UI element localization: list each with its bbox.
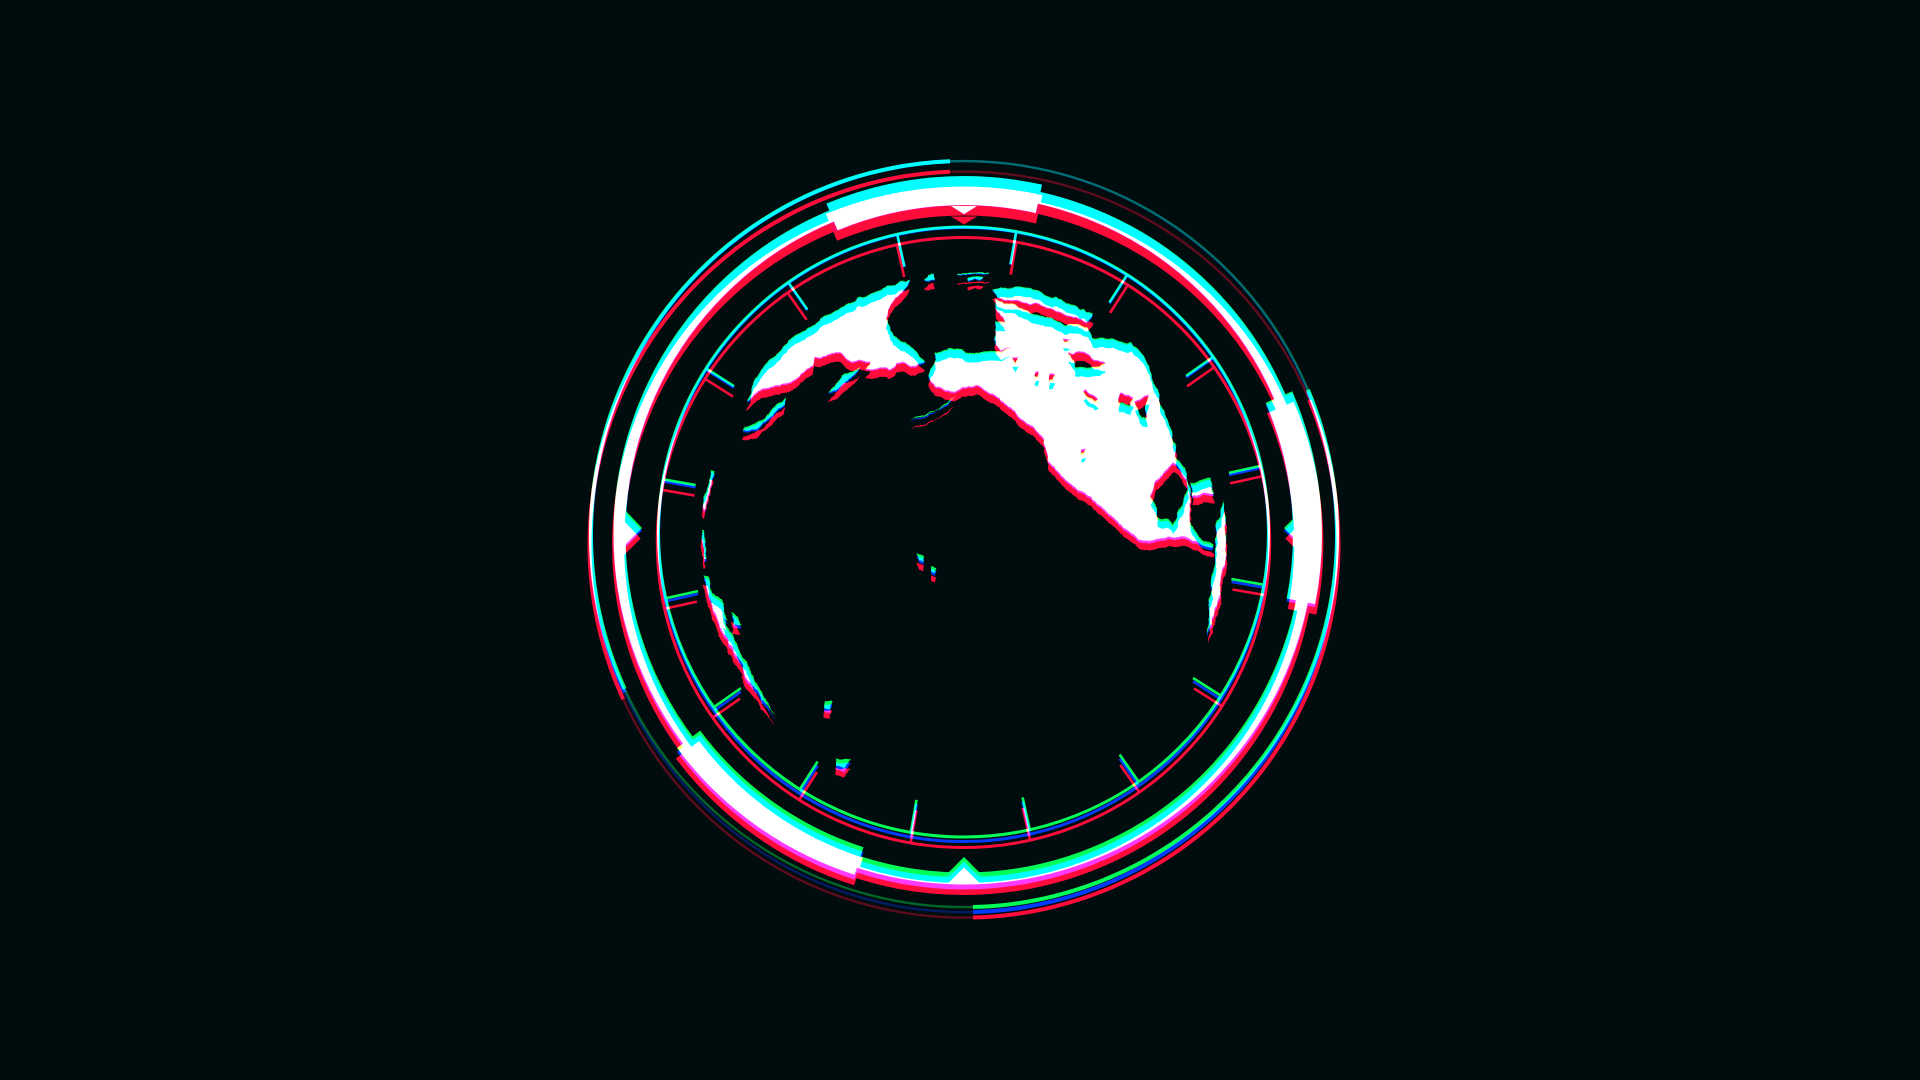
outer ring dim arcs <box>623 161 1309 918</box>
middle ring <box>618 190 1310 889</box>
outer ring bright arcs <box>589 161 1339 918</box>
triangle markers <box>622 206 1296 890</box>
inner ring <box>657 227 1270 848</box>
globe land silhouette <box>701 273 1227 778</box>
tick marks <box>662 232 1265 843</box>
thick ring segments <box>687 191 1309 872</box>
